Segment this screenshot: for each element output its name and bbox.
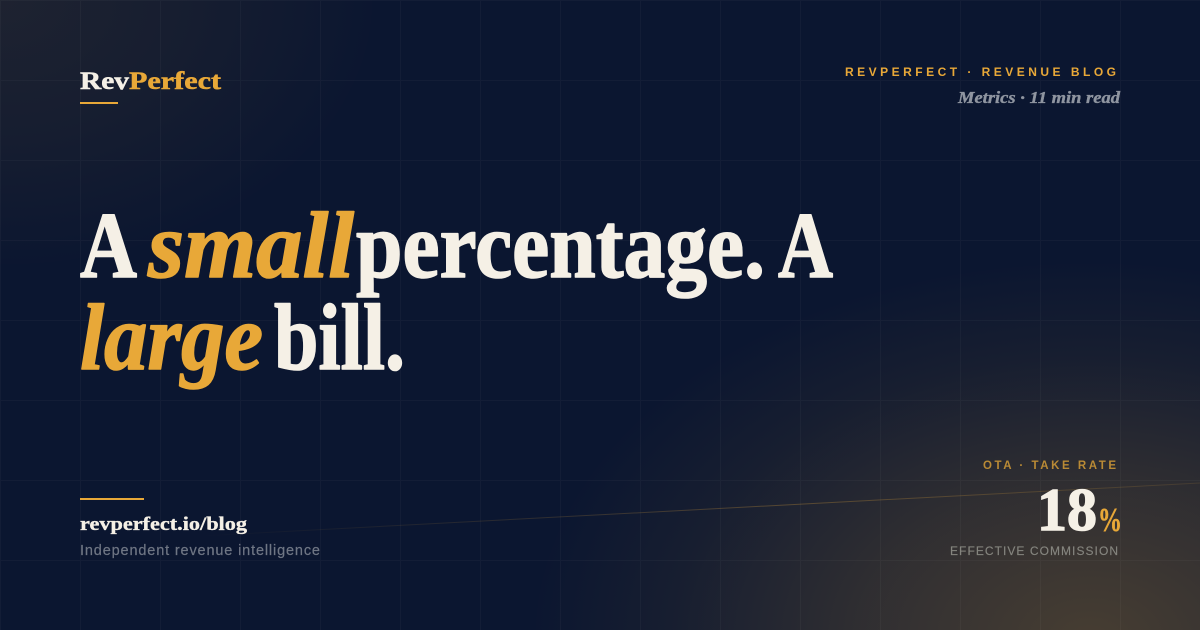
site url: revperfect.io/blog <box>80 514 248 535</box>
headline: bill. <box>274 286 405 390</box>
logo: Perfect <box>129 68 222 95</box>
stat: take rate <box>950 460 1122 558</box>
logo: Rev <box>80 68 130 95</box>
eyebrow: blog name: REVPERFECT · REVENUE BLOG <box>845 65 1116 79</box>
stat unit: % <box>1098 502 1122 539</box>
stat label: OTA · TAKE RATE <box>983 460 1116 472</box>
category and read time: Metrics · 11 min read <box>957 88 1121 107</box>
headline: small <box>147 194 354 298</box>
headline: A <box>778 194 833 298</box>
headline: percentage. <box>356 194 765 298</box>
tagline: Independent revenue intelligence <box>80 543 320 559</box>
stat caption: EFFECTIVE COMMISSION <box>950 544 1118 558</box>
headline: large <box>80 286 263 390</box>
stat value: 18 <box>1037 477 1097 543</box>
headline: A <box>80 194 137 298</box>
headline <box>80 194 833 390</box>
logo <box>80 68 222 95</box>
footer rule <box>80 498 144 500</box>
logo underline <box>80 102 118 104</box>
